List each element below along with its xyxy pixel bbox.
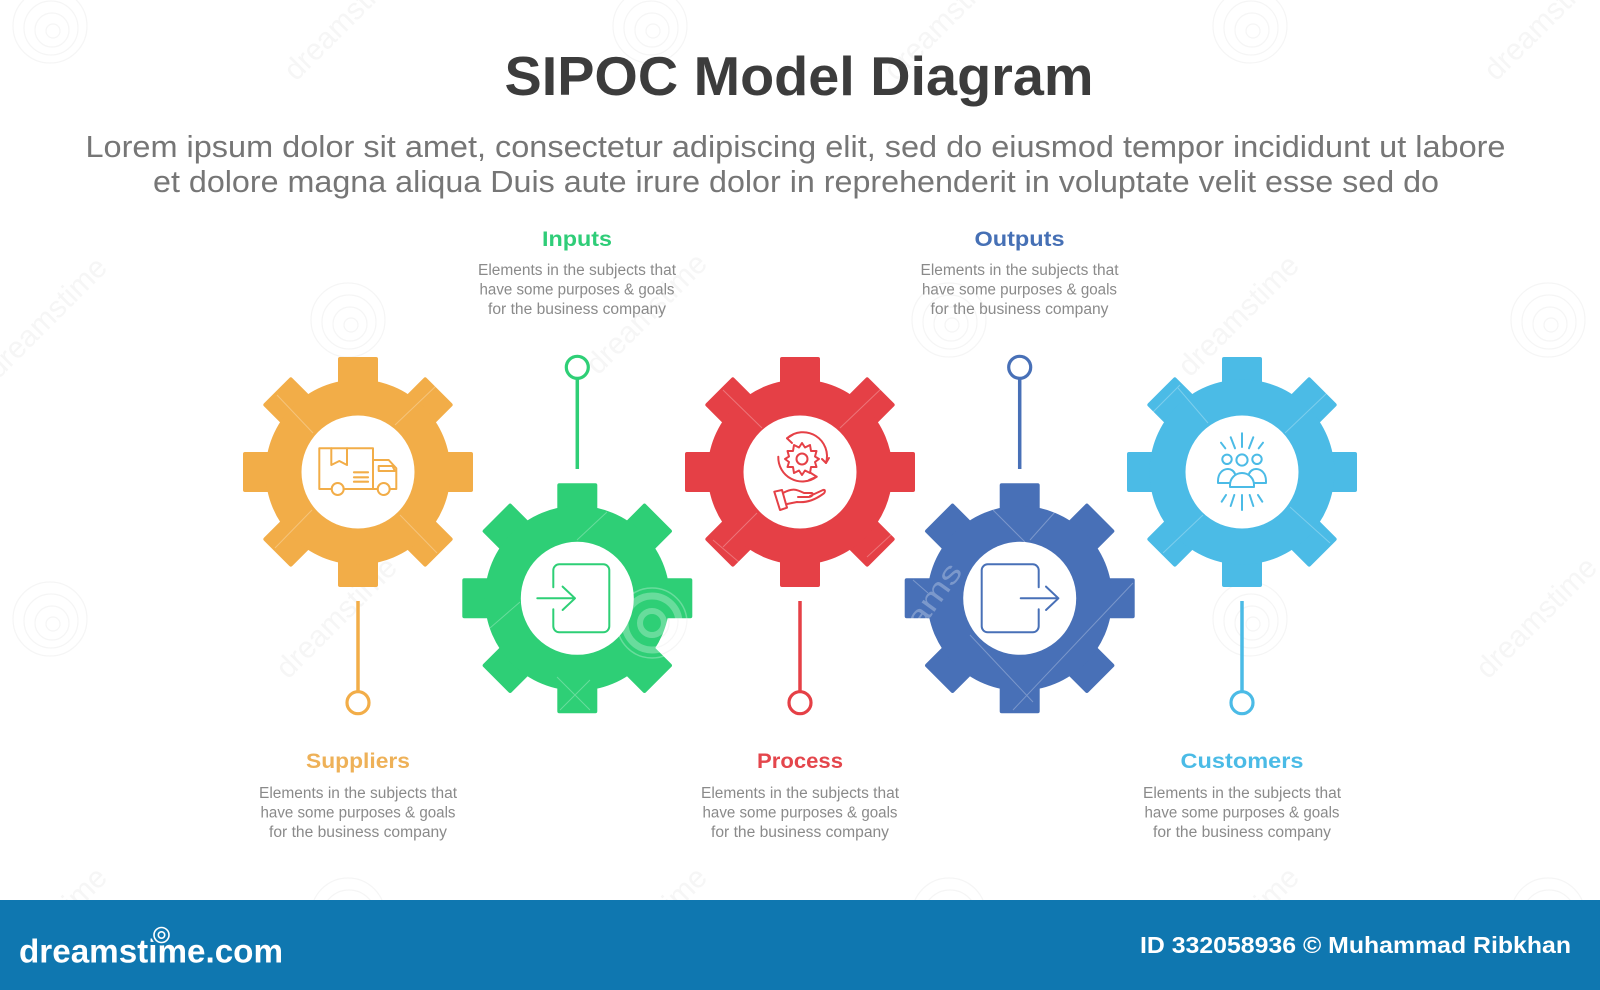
panel: inputs [462, 228, 692, 713]
icon: delivery truck [319, 448, 396, 495]
description: process: Elements in the subjects that [701, 785, 900, 802]
panel: suppliers [243, 357, 473, 841]
description: customers: Elements in the subjects that [1143, 785, 1342, 802]
icon: customer group [1218, 433, 1266, 510]
label: outputs: Outputs [974, 228, 1064, 251]
image credit: ID 332058936 © Muhammad Ribkhan [1140, 932, 1571, 958]
text: dreams [866, 557, 969, 681]
connector: suppliers [347, 601, 369, 714]
description: suppliers: for the business company [269, 824, 447, 841]
panel: outputs [905, 228, 1135, 713]
gear: process [685, 357, 915, 587]
footer banner [0, 900, 1600, 990]
connector: process [789, 601, 811, 714]
description: suppliers [259, 785, 458, 841]
icon: gear cycle in hand [774, 432, 829, 510]
description: suppliers: have some purposes & goals [260, 804, 456, 822]
panel: customers [1127, 357, 1357, 841]
description: inputs [478, 262, 677, 318]
text: dreamstime [270, 551, 404, 685]
connector: outputs [1009, 356, 1031, 469]
label: suppliers: Suppliers [306, 750, 410, 773]
gear: customers [1127, 357, 1357, 587]
gear: suppliers [243, 357, 473, 587]
description: inputs: for the business company [488, 301, 666, 318]
description: outputs [920, 262, 1119, 318]
text: dreamstime [1172, 249, 1306, 383]
description: inputs: Elements in the subjects that [478, 262, 677, 279]
text: dreamstime [1470, 551, 1600, 685]
title: SIPOC Model Diagram [504, 45, 1094, 107]
description: outputs: have some purposes & goals [922, 282, 1117, 298]
description: inputs: have some purposes & goals [480, 282, 675, 298]
logo: dreamstime: dreamstime.com [19, 932, 283, 970]
subtitle text block [86, 129, 1506, 199]
label: process: Process [757, 750, 843, 773]
gear: inputs [462, 483, 692, 713]
connector: customers [1231, 601, 1253, 714]
description: customers [1143, 785, 1342, 841]
panel: process [685, 357, 915, 841]
icon: exit arrow [982, 564, 1058, 632]
description: outputs: for the business company [930, 301, 1109, 318]
description: process [701, 785, 900, 841]
description: process: have some purposes & goals [702, 804, 898, 822]
description: process: for the business company [711, 824, 889, 841]
label: customers: Customers [1180, 750, 1304, 773]
icon: enter arrow [537, 564, 609, 632]
label: inputs: Inputs [542, 228, 612, 251]
description: outputs: Elements in the subjects that [920, 262, 1119, 279]
description: customers: for the business company [1153, 824, 1331, 841]
subtitle text block: Lorem ipsum dolor sit amet, consectetur adipiscing elit, sed do eiusmod tempor incididunt ut labore [86, 129, 1506, 164]
subtitle text block: et dolore magna aliqua Duis aute irure dolor in reprehenderit in voluptate velit esse sed do [153, 164, 1439, 199]
description: customers: have some purposes & goals [1144, 804, 1340, 822]
gear: outputs [905, 483, 1135, 713]
connector: inputs [566, 356, 588, 469]
text: dreamstime [580, 247, 714, 381]
description: suppliers: Elements in the subjects that [259, 785, 458, 802]
